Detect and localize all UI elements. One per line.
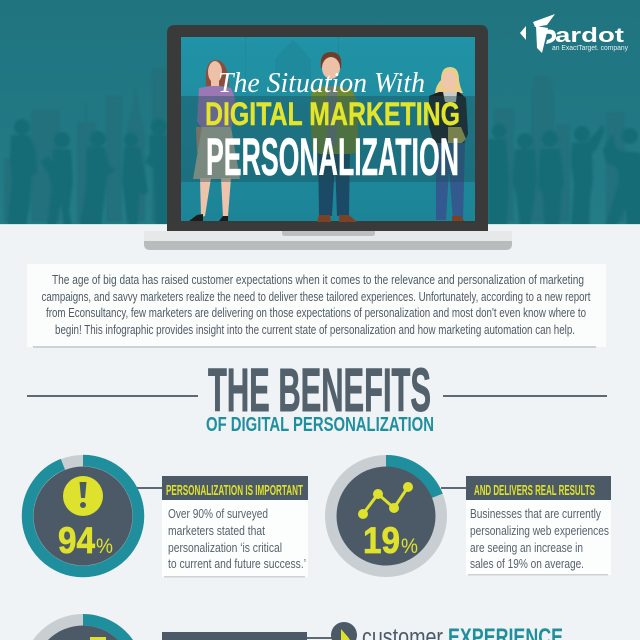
card: personalization is important: marketers stated that [168, 523, 265, 538]
figure: man in green jacket [310, 52, 358, 222]
panel: header banner [0, 0, 640, 228]
card: personalization is important: Over 90% of surveyed [168, 506, 268, 521]
card: and delivers real results: sales of 19% on average. [470, 556, 584, 571]
title: script line: The Situation With [218, 67, 425, 99]
stat: 94%: 94 [58, 520, 95, 561]
laptop bezel [167, 25, 488, 231]
title: digital marketing: DIGITAL MARKETING [205, 96, 460, 132]
card: personalization is important: PERSONALIZATION IS IMPORTANT [166, 482, 303, 499]
icon: cursor [331, 622, 357, 640]
card: personalization is important: personalization ‘is critical [168, 540, 282, 555]
logo: Pardot: ardot [555, 25, 624, 47]
heading: the benefits: OF DIGITAL PERSONALIZATION [206, 414, 434, 436]
title band [181, 96, 475, 182]
figure: woman in purple [189, 60, 240, 221]
panel: intro text [27, 264, 606, 348]
card: and delivers real results: Businesses that are currently [470, 506, 601, 521]
stat: 19%: % [401, 535, 418, 558]
card: and delivers real results: are seeing an increase in [470, 540, 583, 555]
city skyline silhouette [4, 114, 624, 222]
card: and delivers real results [466, 476, 611, 576]
card: motivations for personalizing [162, 632, 333, 640]
figure: blonde woman [429, 67, 468, 221]
card: personalization is important [162, 476, 308, 578]
laptop [0, 25, 640, 250]
stat: third circle [33, 614, 133, 640]
crowd silhouette left [8, 120, 167, 228]
logo: Pardot [520, 14, 628, 53]
icon: yellow mark [90, 637, 106, 640]
stat: 94%: % [96, 535, 113, 558]
stat: 19% [325, 455, 467, 577]
stat: 94% [22, 455, 163, 577]
card: personalization is important: to current and future success.’ [168, 556, 306, 571]
crowd silhouette right [489, 125, 640, 228]
laptop screen [181, 37, 475, 221]
heading: the benefits [27, 356, 607, 436]
heading: the benefits: THE BENEFITS [208, 356, 431, 424]
logo: Pardot: an ExactTarget. company [552, 45, 628, 52]
icon: line chart [358, 482, 413, 519]
icon: exclamation [63, 476, 103, 516]
list item: customer experience [331, 622, 563, 640]
laptop base [0, 224, 640, 250]
stat: 19%: 19 [363, 520, 400, 561]
